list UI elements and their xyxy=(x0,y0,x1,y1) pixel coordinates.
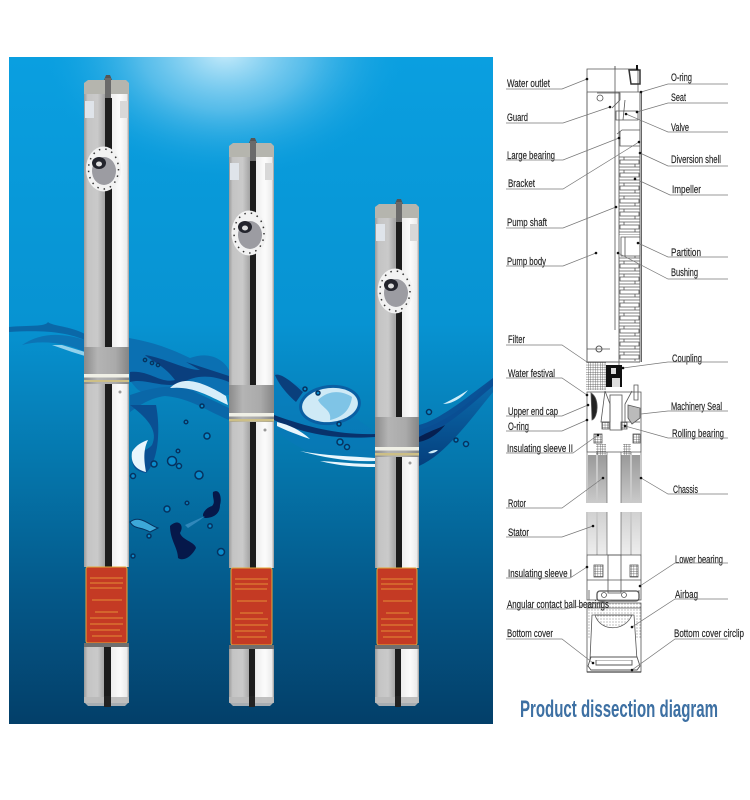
label: bottom cover xyxy=(506,628,594,664)
label: water festival: Water festival xyxy=(508,368,555,380)
motor rotor and stator xyxy=(586,444,642,555)
outer casing xyxy=(587,92,642,362)
label: large bearing xyxy=(506,137,620,162)
label: coupling xyxy=(622,353,728,369)
air bubbles and dark drops xyxy=(130,358,468,558)
label: insulating sleeve II: Insulating sleeve II xyxy=(507,443,573,455)
water splash waves xyxy=(9,322,493,559)
label: stator: Stator xyxy=(508,527,529,539)
label: bracket xyxy=(506,141,640,190)
pump 1 xyxy=(84,75,129,707)
label: water festival xyxy=(506,368,588,396)
label: bushing: Bushing xyxy=(671,267,698,279)
label: pump shaft: Pump shaft xyxy=(507,217,547,229)
label: guard: Guard xyxy=(507,112,528,124)
label: airbag xyxy=(631,589,728,628)
label: impeller: Impeller xyxy=(672,184,701,196)
airbag and bottom cover xyxy=(587,603,641,672)
label: rolling bearing: Rolling bearing xyxy=(672,428,724,440)
label: bottom cover circlip xyxy=(631,628,744,671)
label: large bearing: Large bearing xyxy=(507,150,555,162)
label: rotor: Rotor xyxy=(508,498,526,510)
label: lower bearing: Lower bearing xyxy=(675,554,723,566)
label: bushing xyxy=(617,252,728,279)
lower bearing and ball bearings xyxy=(587,555,641,601)
label: bottom cover: Bottom cover xyxy=(507,628,553,640)
label: o-ring upper: O-ring xyxy=(671,72,692,84)
seal and bearing section xyxy=(587,385,641,452)
label: upper end cap: Upper end cap xyxy=(508,406,558,418)
label: valve xyxy=(625,113,728,134)
label: diversion shell: Diversion shell xyxy=(671,154,721,166)
water droplet bubble xyxy=(275,375,363,428)
label: airbag: Airbag xyxy=(675,589,698,601)
cross-section diagram of the pump xyxy=(586,65,642,672)
label: valve: Valve xyxy=(671,122,689,134)
label: rolling bearing xyxy=(624,425,728,440)
label: seat: Seat xyxy=(671,92,686,104)
label: rotor xyxy=(506,477,604,510)
pump head and outlet xyxy=(587,65,640,380)
label: guard xyxy=(506,106,611,124)
left part labels xyxy=(506,78,640,664)
label: chassis xyxy=(640,477,728,496)
label: filter xyxy=(506,334,587,362)
label: water outlet: Water outlet xyxy=(507,78,550,90)
label: lower bearing xyxy=(639,554,728,587)
label: impeller xyxy=(634,178,728,196)
label: water outlet xyxy=(506,78,588,90)
label: chassis: Chassis xyxy=(673,484,698,496)
label: o-ring upper xyxy=(640,72,728,93)
impeller stack xyxy=(619,155,640,361)
label: partition xyxy=(637,242,728,259)
label: o-ring lower: O-ring xyxy=(508,421,529,433)
label: pump body: Pump body xyxy=(507,256,546,268)
panel: blue water photo background xyxy=(9,57,493,724)
label: machinery seal: Machinery Seal xyxy=(671,401,722,413)
label: pump shaft xyxy=(506,206,617,229)
label: pump body xyxy=(506,252,597,268)
pump 2 xyxy=(229,138,274,707)
pump 3 xyxy=(375,199,419,707)
filter and coupling xyxy=(586,346,622,390)
label: o-ring lower xyxy=(506,419,588,433)
label: coupling: Coupling xyxy=(672,353,702,365)
label: seat xyxy=(636,92,728,113)
label: bracket: Bracket xyxy=(508,178,535,190)
label: filter: Filter xyxy=(508,334,525,346)
label: insulating sleeve II xyxy=(506,434,599,455)
label: diversion shell xyxy=(639,152,728,166)
label: partition: Partition xyxy=(671,247,701,259)
label: machinery seal xyxy=(641,401,728,414)
label: insulating sleeve I: Insulating sleeve I xyxy=(508,568,572,580)
label: angular contact ball bearings: Angular contact ball bearings xyxy=(507,599,609,611)
right part labels xyxy=(617,72,744,671)
label: stator xyxy=(506,525,594,539)
